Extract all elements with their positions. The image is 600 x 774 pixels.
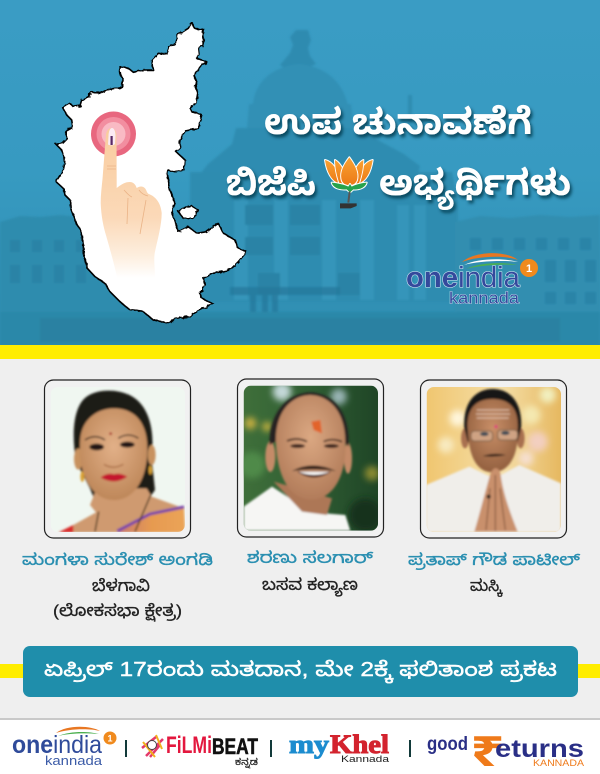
- content background: [0, 359, 600, 720]
- footer logo: oneindia: kannada: [45, 753, 103, 768]
- callout: polling dates banner: ಏಪ್ರಿಲ್ 17ರಂದು ಮತದಾನ, ಮೇ 2ಕ್ಕೆ ಫಲಿತಾಂಶ ಪ್ರಕಟ: [44, 659, 557, 684]
- candidate 3 name: ಪ್ರತಾಪ್ ಗೌಡ ಪಾಟೀಲ್: [408, 551, 581, 570]
- photo frame: [420, 380, 566, 538]
- photo: candidate 3: [426, 387, 561, 532]
- candidate 2 constituency: ಬಸವ ಕಲ್ಯಾಣ: [262, 577, 358, 597]
- callout: polling dates banner: [23, 646, 578, 697]
- title line 2 left: ಬಿಜೆಪಿ: [226, 162, 316, 203]
- title line 2 right: ಅಭ್ಯರ್ಥಿಗಳು: [379, 162, 571, 211]
- candidate 2 name: ಶರಣು ಸಲಗಾರ್: [247, 549, 374, 567]
- footer logo: oneindia: oneindia: [12, 731, 102, 759]
- candidate 3 constituency: ಮಸ್ಕಿ: [470, 578, 503, 597]
- header background: [0, 0, 600, 346]
- divider: [125, 740, 127, 757]
- photo frame: [44, 380, 190, 538]
- title line 1: ಉಪ ಚುನಾವಣೆಗೆ: [264, 101, 532, 142]
- yellow band: [0, 345, 600, 359]
- footer logo: Filmibeat: ಕನ್ನಡ: [235, 757, 258, 769]
- yellow date band: [0, 664, 600, 678]
- footer logo: myKhel: Kannada: [341, 754, 390, 765]
- Oneindia Kannada logo: [406, 253, 538, 308]
- logo sub label: kannada: [449, 288, 520, 308]
- logo badge: 1: [526, 263, 532, 275]
- footer logo: goodreturns: good: [427, 734, 468, 755]
- panel: candidate 3: [408, 380, 581, 597]
- title: [226, 101, 571, 211]
- icon: hand: [101, 128, 162, 278]
- footer logo: goodreturns: [427, 728, 585, 774]
- icon: BJP lotus: [325, 157, 373, 208]
- divider: [270, 740, 272, 757]
- footer: [0, 718, 600, 774]
- footer logo: Filmibeat: FiLMi: [166, 732, 212, 759]
- photo: candidate 2: [239, 382, 382, 532]
- logo wordmark: oneindia: [406, 262, 521, 294]
- footer logo: oneindia: 1: [107, 734, 113, 744]
- panel: candidate 1: [22, 380, 213, 622]
- candidate 1 name: ಮಂಗಳಾ ಸುರೇಶ್ ಅಂಗಡಿ: [22, 552, 213, 569]
- candidate 1 seat type: (ಲೋಕಸಭಾ ಕ್ಷೇತ್ರ): [53, 603, 182, 622]
- footer logo: myKhel: Khel: [330, 730, 389, 759]
- footer logo: myKhel: my: [289, 730, 329, 759]
- background building silhouette: [0, 30, 600, 346]
- footer logo: oneindia: [12, 727, 116, 768]
- footer logo: Filmibeat: [142, 732, 258, 769]
- footer logo: goodreturns: eturns: [495, 735, 584, 763]
- candidate 1 constituency: ಬೆಳಗಾವಿ: [92, 578, 150, 595]
- footer logo: myKhel: [289, 730, 390, 765]
- Karnataka map: [56, 22, 247, 323]
- photo frame: [238, 379, 384, 537]
- icon: ink-marked voting finger: [91, 112, 162, 278]
- divider: [409, 740, 411, 757]
- panel: candidate 2: [238, 379, 384, 597]
- photo: candidate 1: [51, 387, 185, 532]
- footer logo: Filmibeat: BEAT: [212, 734, 258, 759]
- logo swoosh: [462, 253, 518, 262]
- footer logo: goodreturns: KANNADA: [533, 758, 585, 769]
- icon: pink target circle: [91, 112, 136, 156]
